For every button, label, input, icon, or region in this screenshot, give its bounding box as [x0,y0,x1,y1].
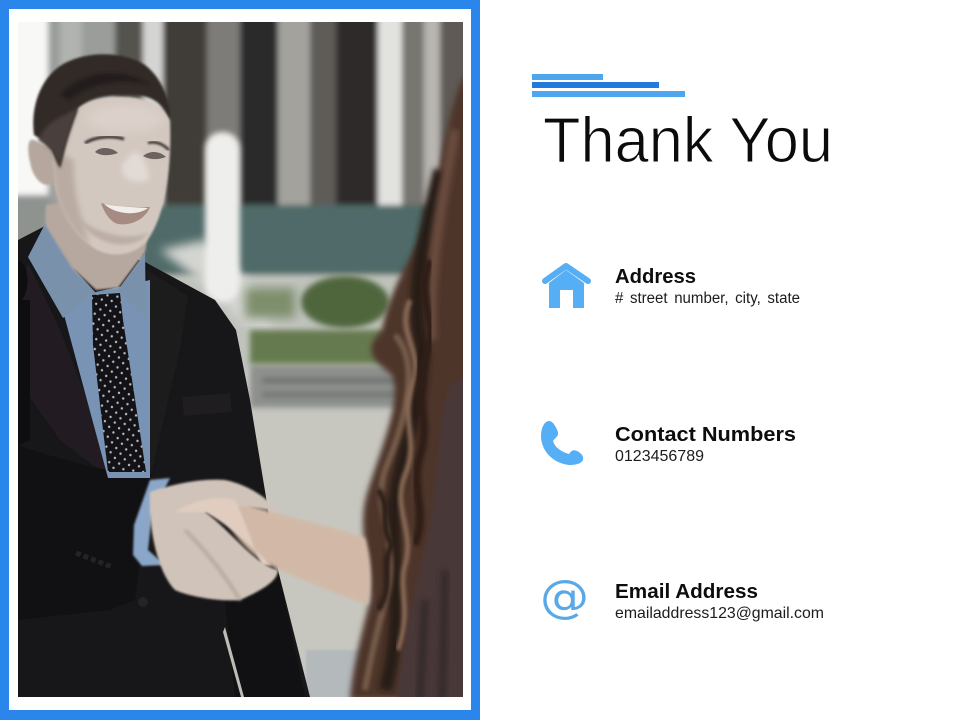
woman: long brown hair and dress [350,78,470,700]
photo: handshake between businessman and woman [10,10,470,700]
man: suit jacket [18,226,310,700]
address text: # street number, city, state [615,290,800,307]
contact item: address [545,266,800,308]
man: dotted tie [92,293,146,472]
heading: contact numbers: Contact Numbers [615,424,796,446]
phone number text: 0123456789 [615,448,704,465]
icon: at sign: @ [540,570,589,623]
heading: email address: Email Address [615,581,758,603]
decorative title bars [532,74,685,97]
handshake: cuff, man's hand, woman's arm [133,478,371,605]
photo frame: blue border [0,0,480,720]
email text: emailaddress123@gmail.com [615,605,824,622]
icon: house [545,266,588,308]
man: blue shirt and collar [28,222,150,478]
photo background: blurred city buildings and street [10,10,470,700]
contact item: phone [541,421,796,465]
man: short dark hair [33,54,171,168]
heading: address: Address [615,266,696,288]
icon: telephone handset [541,421,583,465]
contact item: email [540,570,824,623]
man: neck and face [28,97,170,290]
title: Thank You [543,104,833,176]
